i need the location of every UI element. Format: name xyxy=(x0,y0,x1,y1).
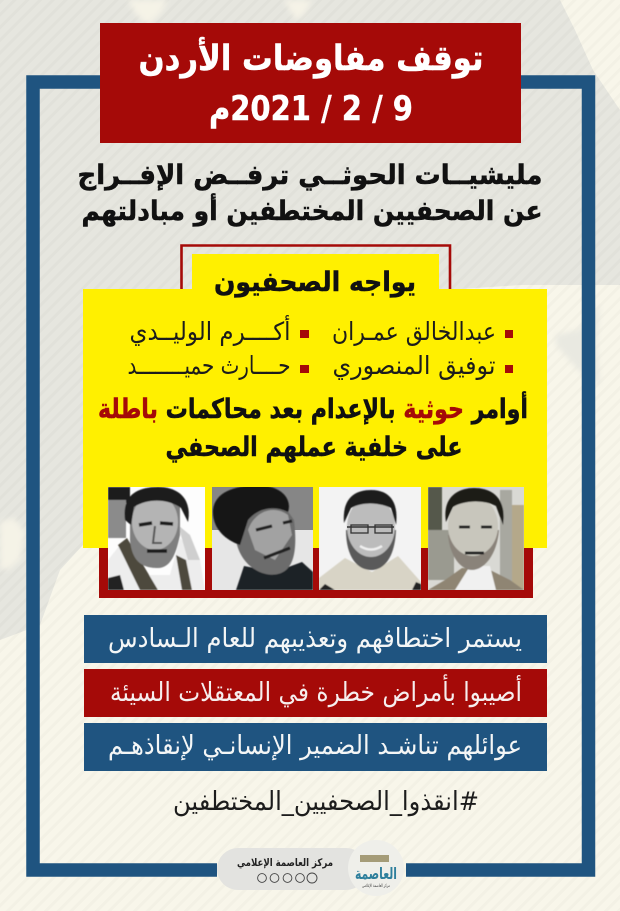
banner 1 xyxy=(84,615,547,663)
social icons xyxy=(258,873,317,883)
name list: أكــــرم الوليــدي xyxy=(130,314,290,346)
heading: يواجه الصحفيون xyxy=(214,267,416,298)
photo 2 xyxy=(212,486,313,590)
name list: عبدالخالق عمـران xyxy=(332,317,496,346)
subtitle line 2: عن الصحفيين المختطفين أو مبادلتهم xyxy=(82,193,542,227)
title line 1: توقف مفاوضات الأردن xyxy=(138,36,484,79)
photo 3 xyxy=(319,487,421,590)
photo 1 xyxy=(108,487,205,590)
red base behind photos xyxy=(99,540,533,598)
logo circle: مركز العاصمة الإعلامي xyxy=(362,883,390,889)
photo 4 xyxy=(428,487,524,590)
subtitle xyxy=(78,160,542,227)
statement: أوامر حوثية بالإعدام بعد محاكمات باطلة xyxy=(98,391,528,425)
title date: 9 / 2 / 2021م xyxy=(209,89,413,129)
banner 2 xyxy=(84,669,547,717)
hashtag: #انقذوا_الصحفيين_المختطفين xyxy=(173,787,479,817)
banner 2: أصيبوا بأمراض خطرة في المعتقلات السيئة xyxy=(110,673,522,708)
blue frame xyxy=(33,82,588,870)
centre name: مركز العاصمة الإعلامي xyxy=(237,857,333,869)
red outline behind heading xyxy=(182,246,450,292)
name list: حــــارث حميــــــــد xyxy=(128,351,290,380)
statement: على خلفية عملهم الصحفي xyxy=(166,432,462,463)
yellow panel: journalists xyxy=(83,254,547,548)
banner 3: عوائلهم تناشـد الضمير الإنسانـي لإنقاذهـم xyxy=(108,731,522,761)
subtitle line 1: مليشيــات الحوثــي ترفــض الإفــراج xyxy=(78,160,542,191)
logo circle: العاصمة xyxy=(355,864,397,883)
name list xyxy=(128,314,513,380)
statement xyxy=(98,391,528,463)
footer logo pill xyxy=(217,848,367,890)
title box xyxy=(100,23,521,143)
banner 3 xyxy=(84,723,547,771)
name list: توفيق المنصوري xyxy=(332,351,496,380)
logo circle xyxy=(348,840,404,896)
banner 1: يستمر اختطافهم وتعذيبهم للعام الـسادس xyxy=(108,624,522,654)
